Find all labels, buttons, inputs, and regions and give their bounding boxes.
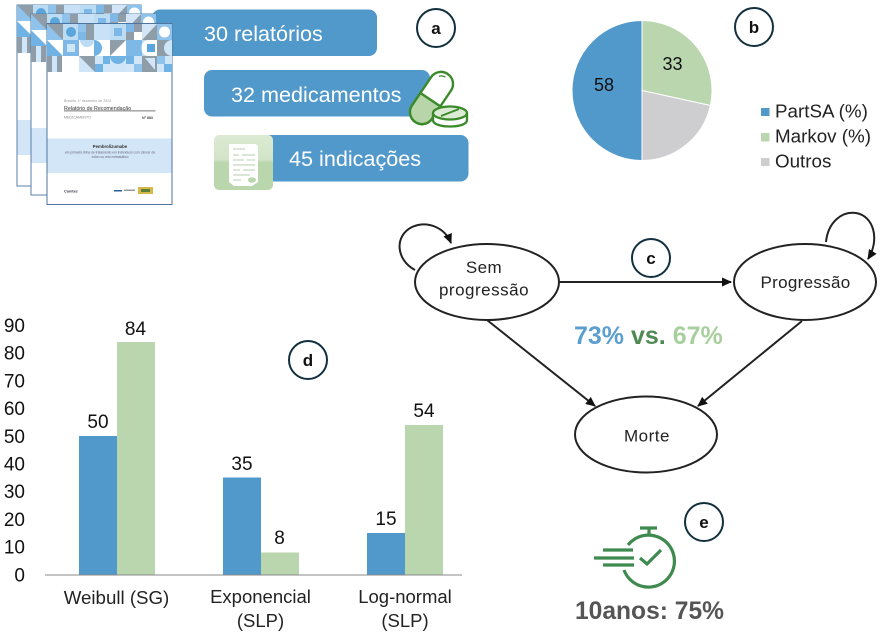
label b: b <box>749 18 759 37</box>
label e <box>685 503 723 541</box>
label d <box>289 341 327 379</box>
icon: indication document <box>214 135 273 190</box>
group: Weibull (SG) <box>64 319 169 608</box>
back report cover <box>17 5 142 186</box>
comparison 73% vs. 67%: 73% vs. 67% <box>574 322 723 350</box>
group: Log-normal (SLP): 15 <box>375 509 397 530</box>
10 anos value: 10anos: 75% <box>575 598 724 625</box>
group: Log-normal (SLP): 54 <box>413 401 435 422</box>
label b <box>735 8 773 46</box>
slice: Outros <box>642 90 710 160</box>
slice: PartSA <box>572 20 642 160</box>
label d: d <box>303 351 313 370</box>
front report cover: cólon ou reto metastático <box>92 155 129 159</box>
state: Sem progressão: Sem <box>466 258 502 277</box>
bar: 32 medicamentos <box>204 70 430 116</box>
pie legend: PartSA (%) <box>775 100 868 122</box>
bar: 45 indicações <box>262 135 468 182</box>
y axis labels: 40 <box>4 454 25 476</box>
group: Log-normal (SLP): (SLP) <box>381 610 429 631</box>
group: Weibull (SG): 50 <box>87 412 109 433</box>
group: Exponencial (SLP): Exponencial <box>210 586 311 607</box>
front report cover: Relatório de Recomendação <box>64 106 131 112</box>
arrow: sem progressão to morte <box>487 320 595 406</box>
arrow: sem progressão to progressão <box>559 281 731 283</box>
group: Exponencial (SLP): (SLP) <box>237 610 284 631</box>
front report cover: em primeira linha de tratamento em indivíduos com câncer de <box>65 150 155 154</box>
state: Morte <box>575 396 717 472</box>
pie legend: Outros <box>775 150 831 172</box>
front report cover: MEDICAMENTO <box>64 116 91 120</box>
label a <box>417 9 455 47</box>
group: Weibull (SG): Weibull (SG) <box>64 587 169 608</box>
bar chart <box>4 316 462 631</box>
front report cover: Conitec <box>64 190 78 194</box>
middle report cover <box>31 14 156 195</box>
group: Log-normal (SLP) <box>358 401 452 631</box>
label c: c <box>646 249 656 268</box>
x axis line <box>45 574 462 576</box>
pie legend: Markov (%) <box>775 126 871 146</box>
bar: 30 relatórios: 30 relatórios <box>204 21 323 46</box>
value 33: 33 <box>662 54 683 74</box>
arrow: progressão to morte <box>698 321 802 406</box>
group: Exponencial (SLP): 8 <box>274 528 285 549</box>
bar: 30 relatórios <box>152 10 377 56</box>
group: Log-normal (SLP): Log-normal <box>358 586 452 607</box>
y axis labels: 50 <box>4 427 25 448</box>
group: Exponencial (SLP): 35 <box>231 454 253 475</box>
y axis labels: 80 <box>4 344 25 365</box>
group: Weibull (SG): 84 <box>125 319 146 340</box>
pie legend <box>761 100 871 172</box>
arrow: progressão loop <box>826 213 874 259</box>
state: Progressão <box>734 244 876 320</box>
y axis labels: 70 <box>4 371 25 392</box>
y axis labels: 0 <box>14 565 25 586</box>
group: Exponencial (SLP) <box>210 454 311 631</box>
y axis labels <box>4 316 25 586</box>
arrow: sem progressão loop <box>400 224 451 270</box>
state: Sem progressão: progressão <box>439 280 529 300</box>
y axis labels: 90 <box>4 316 25 337</box>
y axis labels: 60 <box>4 399 25 420</box>
label e: e <box>699 513 709 532</box>
y axis labels: 20 <box>4 510 25 531</box>
slice: Markov <box>642 20 712 105</box>
y axis labels: 30 <box>4 482 25 503</box>
bar: 32 medicamentos: 32 medicamentos <box>231 82 402 107</box>
state: Progressão: Progressão <box>761 273 850 292</box>
front report cover <box>47 24 172 204</box>
bar: 45 indicações: 45 indicações <box>289 146 421 171</box>
front report cover: Nº 883 <box>142 116 153 120</box>
state: Sem progressão <box>415 244 559 320</box>
report document stack <box>17 5 172 204</box>
label c <box>632 239 670 277</box>
icon: pills <box>405 67 467 129</box>
front report cover: Pembrolizumabe <box>93 144 128 149</box>
state: Morte: Morte <box>624 426 670 446</box>
label a: a <box>431 19 441 38</box>
pie chart <box>572 20 712 160</box>
value 58: 58 <box>594 75 614 95</box>
icon: stopwatch <box>594 528 674 587</box>
state transition diagram <box>400 213 876 472</box>
y axis labels: 10 <box>4 538 25 559</box>
front report cover: Brasília, 1º dezembro de 2023 <box>64 99 111 103</box>
